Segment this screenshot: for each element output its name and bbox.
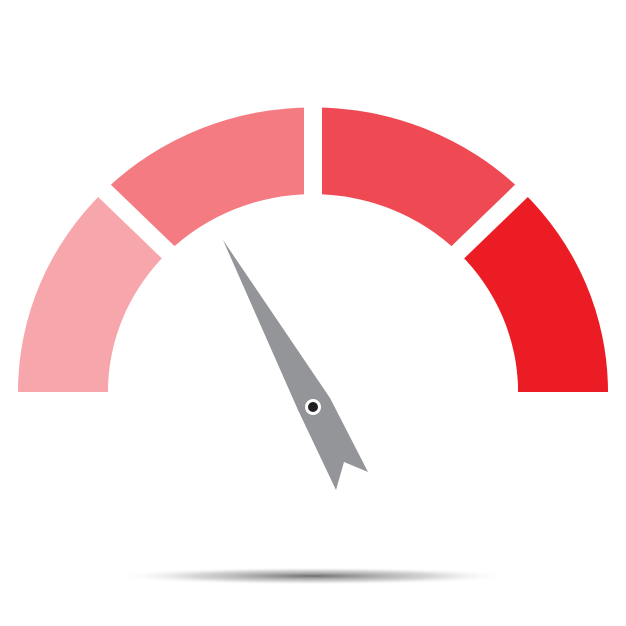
gauge arc [18, 83, 608, 393]
needle pivot [305, 399, 321, 415]
shadow [113, 567, 513, 585]
segment: lightest pink [18, 191, 168, 392]
segment: deep red [458, 191, 608, 392]
needle [223, 240, 368, 490]
segment: medium red [313, 107, 522, 252]
segment: light red [104, 107, 313, 252]
